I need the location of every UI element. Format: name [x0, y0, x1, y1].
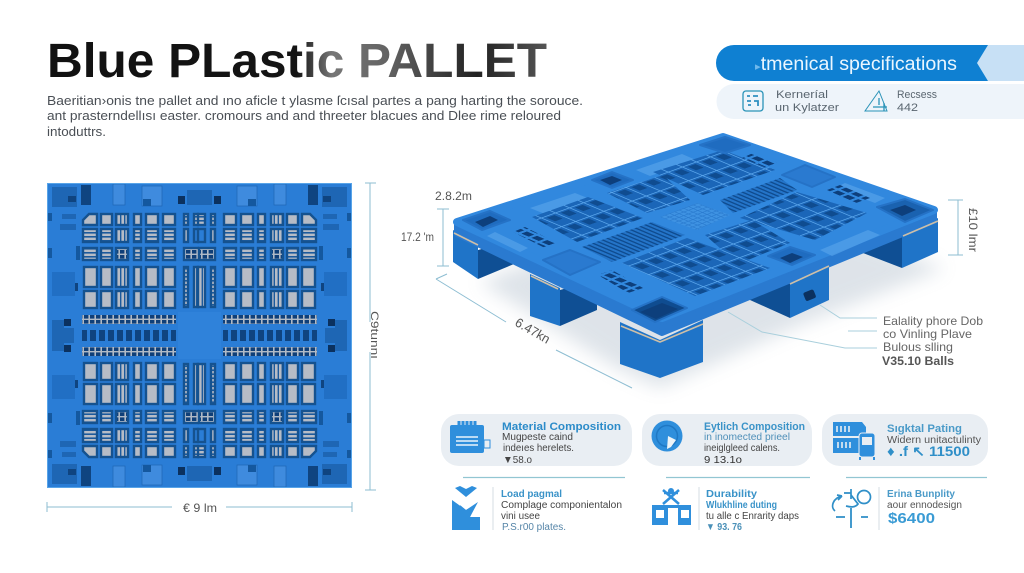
intro paragraph: [47, 93, 583, 139]
back legs: [453, 218, 938, 326]
icon: arrows: [833, 489, 870, 528]
item: durability: tu alle c Enrarity daps: [706, 511, 799, 522]
card text: 9 13.1o: [704, 454, 742, 466]
item: usability price: aour ennodesign: [887, 500, 962, 511]
icon: transit: [833, 422, 875, 460]
card text: ▼58.o: [503, 454, 532, 466]
callout: pallet features: Bulous slling: [883, 340, 953, 354]
dimension: depth label: 17.2 'm: [401, 230, 434, 244]
item: usability price: $6400: [888, 510, 935, 527]
panel: ethylene composition card: [642, 414, 812, 466]
icon: envelope tray: [452, 486, 480, 530]
icon: material sheet: [743, 91, 763, 111]
card text: Material Composition: [502, 421, 621, 433]
front corner leg: [620, 320, 703, 378]
dimension: iso right height: £10 lmr: [966, 208, 980, 252]
icon: building: [652, 488, 691, 525]
card text: Mugpeste caind: [502, 432, 573, 443]
top view of pallet: [47, 183, 352, 488]
callout: pallet features: V35.10 Balls: [882, 354, 954, 368]
card text: ♦ .f ↖ 11500: [887, 443, 970, 459]
item: usability price: [833, 487, 962, 530]
dimension: top view width: [47, 501, 352, 515]
dimension: top view width: € 9 lm: [183, 501, 217, 515]
panel: specification details: [716, 84, 1024, 119]
deck top: [457, 137, 934, 318]
callout: pallet features: [728, 305, 983, 368]
dimension: iso length: 6.47kn: [512, 315, 553, 347]
item: usability price: Erina Bunplity: [887, 488, 955, 500]
dimension: top view height: C9tunnı: [368, 311, 380, 359]
banner heading: ▸tmenical specifications: [755, 54, 957, 75]
card text: Eytlich Composition: [704, 421, 805, 433]
panel: technical specifications banner: [716, 45, 1024, 81]
item: load rating: vini usee: [501, 511, 540, 522]
card text: [502, 421, 621, 466]
text: recess spec: [897, 89, 937, 114]
text: kernel spec: [775, 89, 839, 114]
icon: blue circle: [652, 420, 682, 452]
item: durability: ▼ 93. 76: [706, 522, 742, 533]
intro paragraph: ant prasterndellısı easter. cromours and and threeter blacues and Dlee rime reloured: [47, 108, 561, 123]
isometric pallet: [453, 137, 945, 388]
intro paragraph: intoduttrs.: [47, 124, 106, 139]
text: recess spec: 442: [897, 102, 918, 114]
text: kernel spec: un Kylatzer: [775, 102, 839, 114]
item: durability: Durability: [706, 488, 757, 500]
card text: in inomected prieel: [704, 432, 790, 443]
icon: clipboard: [450, 421, 490, 453]
card text: [887, 423, 981, 459]
dimension: deck height label: 2.8.2m: [435, 189, 472, 203]
dimension: iso length: [436, 274, 632, 388]
card text: ineiglgleed calens.: [704, 443, 780, 454]
deck panels: [532, 150, 867, 296]
deck side: [457, 211, 934, 333]
dimension: iso right height: [948, 200, 980, 255]
text: recess spec: Recsess: [897, 89, 937, 101]
callout: pallet features: co Vinling Plave: [883, 327, 972, 341]
pocket openings: [475, 176, 916, 319]
item: load rating: Complage componientalon: [501, 500, 622, 511]
panel: material composition card: [441, 414, 632, 466]
card text: indeıes herelets.: [503, 443, 574, 454]
text: kernel spec: Kerneríal: [776, 89, 828, 101]
item: load rating: [452, 486, 622, 533]
item: load rating: Load pagmal: [501, 488, 562, 500]
dimension: top view height: [365, 183, 380, 490]
icon: warning triangle: [865, 91, 887, 111]
corner and mid pockets: [463, 137, 933, 322]
dimension: depth bracket: [437, 209, 449, 266]
tan seam: [454, 221, 938, 342]
floor shadow: [480, 235, 945, 388]
card text: [704, 421, 805, 466]
item: durability: Wlukhline duting: [706, 499, 777, 511]
item: durability: [652, 487, 799, 533]
panel: digital rating card: [822, 414, 988, 466]
title: Blue PLastic PALLET: [47, 35, 547, 88]
item: load rating: P.S.r00 plates.: [502, 522, 566, 533]
dividers: [463, 476, 987, 478]
vent grids: [513, 153, 870, 293]
intro paragraph: Baeritian›onis tne pallet and ıno aficle t ylasme ſcısal partes a pang harting the sorouce.: [47, 93, 583, 108]
card text: Widern unitactulinty: [887, 435, 981, 446]
light rim strips: [487, 154, 885, 256]
callout: pallet features: Ealality phore Dob: [883, 314, 983, 328]
card text: Sıgktal Pating: [887, 423, 962, 435]
